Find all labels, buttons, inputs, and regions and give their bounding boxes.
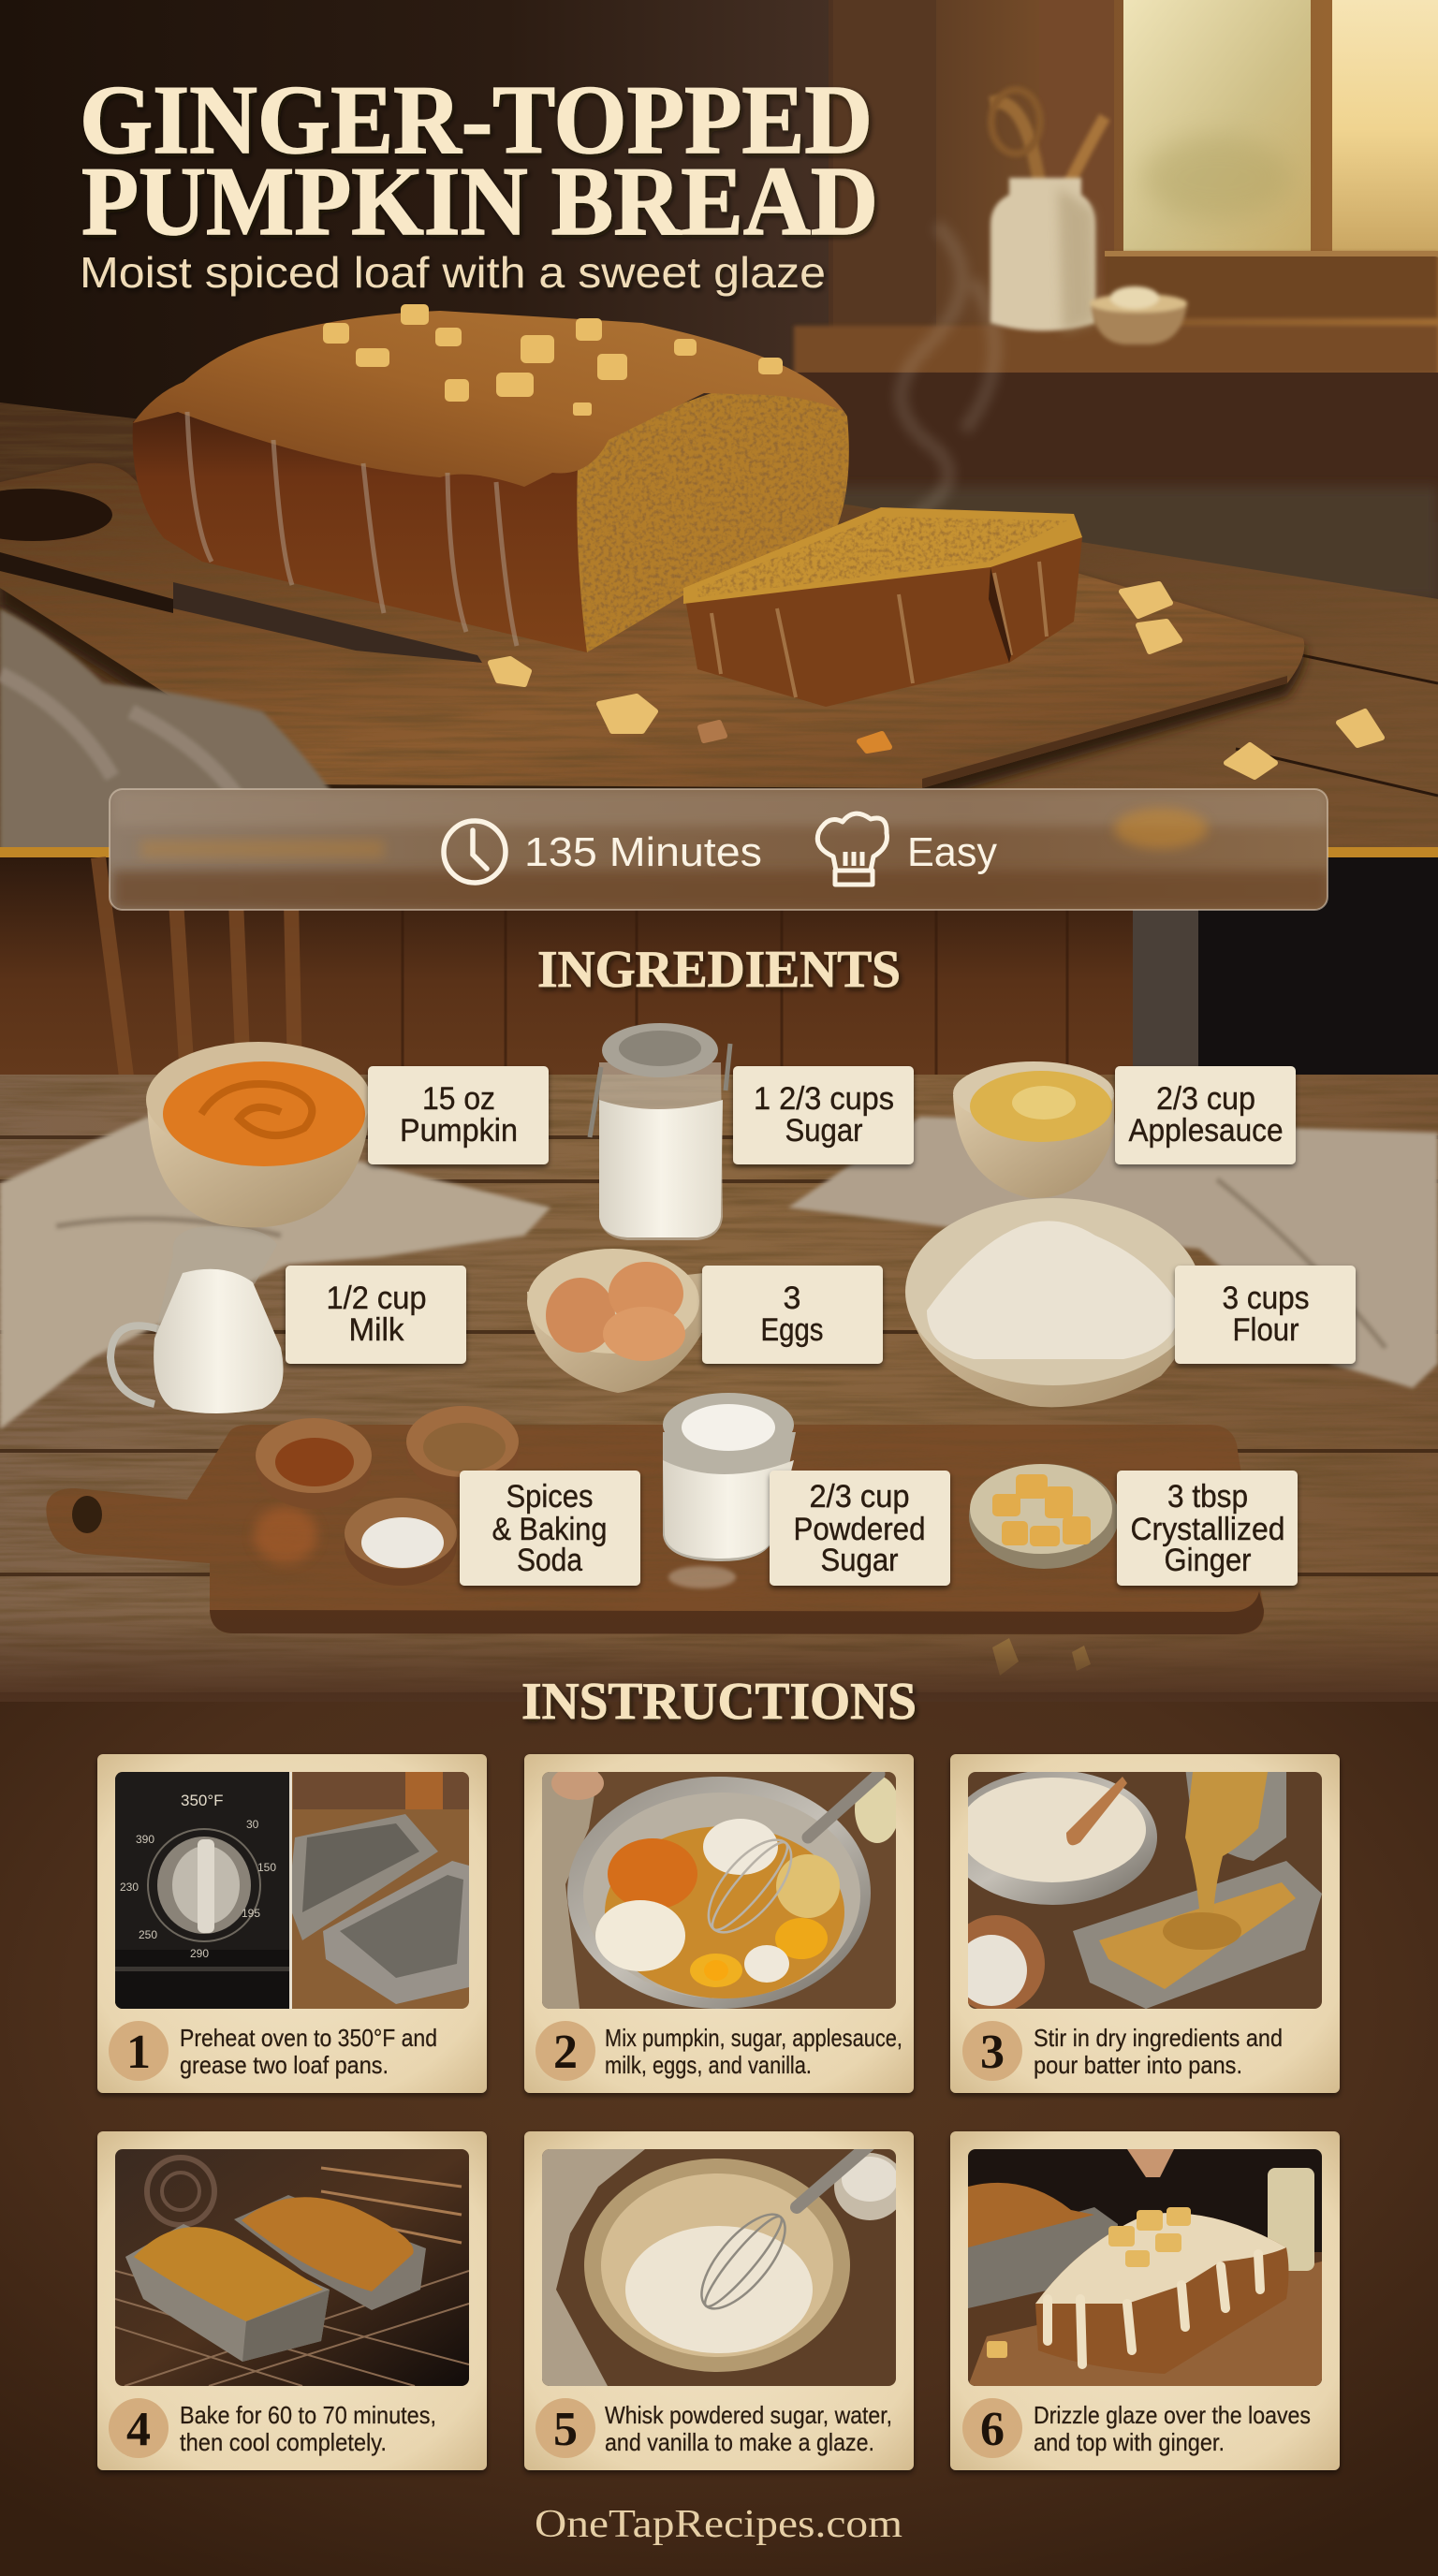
step 1 photo: oven dial and loaf pans: 390 bbox=[136, 1833, 154, 1846]
wooden cutting board bbox=[0, 463, 1304, 801]
label: crystallized ginger: 3 tbsp bbox=[1167, 1479, 1248, 1515]
step 6 text: Drizzle glaze over the loaves bbox=[1034, 2401, 1311, 2429]
label: applesauce bbox=[1115, 1066, 1296, 1164]
orange divider band bbox=[0, 847, 1438, 857]
heading: ingredients: INGREDIENTS bbox=[537, 941, 901, 999]
ingredient: spice bowls bbox=[256, 1406, 519, 1586]
step 2 number: 2 bbox=[553, 2026, 578, 2079]
step 1 photo: oven dial and loaf pans: 195 bbox=[242, 1907, 260, 1920]
label: powdered sugar bbox=[770, 1471, 950, 1586]
step 1 number: 1 bbox=[126, 2026, 151, 2079]
pumpkin loaf bbox=[133, 304, 849, 652]
step 6 photo: glazed loaf topped with ginger bbox=[968, 2149, 1322, 2386]
glass time and difficulty bar bbox=[110, 789, 1329, 910]
step 3 photo: pouring batter into pan bbox=[947, 1767, 1322, 2012]
step 1 photo: oven dial and loaf pans bbox=[115, 1772, 469, 2009]
ingredient: milk jug bbox=[110, 1226, 283, 1413]
table top bbox=[0, 402, 1438, 856]
label: crystallized ginger: Crystallized bbox=[1131, 1512, 1284, 1547]
step card 6 bbox=[950, 2131, 1340, 2470]
cream jar with utensils bbox=[990, 90, 1105, 332]
label: flour bbox=[1175, 1266, 1356, 1364]
step 3 number bbox=[962, 2021, 1022, 2081]
label: sugar bbox=[733, 1066, 914, 1164]
window with wooden frame bbox=[829, 0, 1438, 374]
step 2 number bbox=[536, 2021, 595, 2081]
step card 2 bbox=[524, 1754, 914, 2093]
label: sugar: Sugar bbox=[785, 1113, 863, 1149]
step 4 text: then cool completely. bbox=[180, 2428, 387, 2456]
label: pumpkin: 15 oz bbox=[422, 1081, 495, 1117]
cutting board with handle bbox=[46, 1425, 1264, 1634]
step 1 text: grease two loaf pans. bbox=[180, 2051, 389, 2079]
label: pumpkin bbox=[368, 1066, 549, 1164]
label: applesauce: 2/3 cup bbox=[1156, 1081, 1255, 1117]
step 3 number: 3 bbox=[980, 2026, 1005, 2079]
title: PUMPKIN BREAD bbox=[81, 146, 878, 256]
icon: clock bbox=[444, 821, 506, 883]
step 2 text bbox=[605, 2024, 902, 2079]
step 1 text: Preheat oven to 350°F and bbox=[180, 2024, 437, 2052]
step 3 text bbox=[1034, 2024, 1283, 2079]
step card 1 bbox=[97, 1754, 487, 2093]
label: milk: Milk bbox=[348, 1312, 404, 1348]
ingredient: powdered sugar jar bbox=[663, 1393, 796, 1561]
step 5 photo: whisking glaze in bowl bbox=[542, 2144, 905, 2386]
label: pumpkin: Pumpkin bbox=[400, 1113, 518, 1149]
panel: wooden ingredients table bbox=[0, 1075, 1438, 1692]
linen cloths on table bbox=[0, 1117, 1438, 1429]
ingredient: sugar jar bbox=[590, 1023, 730, 1240]
linen cloth bbox=[0, 607, 331, 847]
label: powdered sugar: Sugar bbox=[820, 1543, 899, 1578]
step 1 photo: oven dial and loaf pans: 230 bbox=[120, 1881, 139, 1894]
time text: 135 Minutes bbox=[524, 829, 762, 875]
step 1 photo: oven dial and loaf pans: 250 bbox=[139, 1928, 157, 1941]
label: milk bbox=[286, 1266, 466, 1364]
steam bbox=[899, 225, 995, 524]
step 6 text: and top with ginger. bbox=[1034, 2428, 1225, 2456]
step 5 number: 5 bbox=[553, 2403, 578, 2456]
step card 3 bbox=[947, 1754, 1340, 2093]
ingredient: pumpkin bowl bbox=[146, 1042, 371, 1227]
step 1 photo: oven dial and loaf pans: 150 bbox=[257, 1861, 276, 1874]
step 6 text bbox=[1034, 2401, 1311, 2456]
label: flour: 3 cups bbox=[1223, 1281, 1309, 1316]
step 4 photo: loaves baking in oven bbox=[115, 2149, 469, 2386]
step card 5 bbox=[524, 2131, 914, 2470]
step 1 photo: oven dial and loaf pans: 30 bbox=[246, 1818, 259, 1831]
step 1 number bbox=[109, 2021, 169, 2081]
step 1 text bbox=[180, 2024, 437, 2079]
label: spices and baking soda: & Baking bbox=[492, 1512, 607, 1547]
window sill shelf bbox=[794, 326, 1438, 599]
label: flour: Flour bbox=[1232, 1312, 1299, 1348]
footer website: OneTapRecipes.com bbox=[535, 2503, 902, 2546]
step 2 text: Mix pumpkin, sugar, applesauce, bbox=[605, 2024, 902, 2052]
label: eggs: 3 bbox=[784, 1281, 800, 1316]
ingredient: crystallized ginger bowl bbox=[969, 1464, 1119, 1676]
ingredient: eggs bowl bbox=[527, 1249, 704, 1393]
step 2 text: milk, eggs, and vanilla. bbox=[605, 2051, 812, 2079]
step 4 number: 4 bbox=[126, 2403, 151, 2456]
knife bbox=[0, 552, 482, 663]
label: crystallized ginger: Ginger bbox=[1165, 1543, 1251, 1578]
title: GINGER-TOPPED bbox=[80, 65, 873, 174]
label: spices and baking soda: Spices bbox=[506, 1479, 594, 1515]
heading: instructions: INSTRUCTIONS bbox=[521, 1673, 917, 1731]
step 2 photo: mixing bowl with wet ingredients bbox=[542, 1766, 900, 2009]
panel: hero photo of pumpkin loaf in rustic kitchen bbox=[0, 0, 1438, 856]
difficulty text: Easy bbox=[907, 829, 997, 875]
label: sugar: 1 2/3 cups bbox=[754, 1081, 894, 1117]
step 5 text: and vanilla to make a glaze. bbox=[605, 2428, 874, 2456]
label: spices and baking soda bbox=[460, 1471, 640, 1586]
ingredient: flour bowl bbox=[905, 1198, 1202, 1407]
step 4 text bbox=[180, 2401, 436, 2456]
step 5 number bbox=[536, 2398, 595, 2458]
label: eggs bbox=[702, 1266, 883, 1364]
label: crystallized ginger bbox=[1117, 1471, 1298, 1586]
panel: lower dark background bbox=[0, 1610, 1438, 2576]
step 5 text bbox=[605, 2401, 892, 2456]
step 6 number: 6 bbox=[980, 2403, 1005, 2456]
step 4 number bbox=[109, 2398, 169, 2458]
label: milk: 1/2 cup bbox=[326, 1281, 427, 1316]
step 5 text: Whisk powdered sugar, water, bbox=[605, 2401, 892, 2429]
step 6 number bbox=[962, 2398, 1022, 2458]
panel: ingredients background with kitchen wall bbox=[0, 857, 1438, 1082]
cut slice of loaf bbox=[683, 507, 1082, 707]
icon: chef hat bbox=[817, 813, 887, 885]
label: powdered sugar: 2/3 cup bbox=[809, 1479, 910, 1515]
step 1 photo: oven dial and loaf pans: 290 bbox=[190, 1947, 209, 1960]
step 3 text: Stir in dry ingredients and bbox=[1034, 2024, 1283, 2052]
label: applesauce: Applesauce bbox=[1129, 1113, 1283, 1149]
subtitle: Moist spiced loaf with a sweet glaze bbox=[80, 248, 826, 297]
ingredient: applesauce bowl bbox=[953, 1061, 1114, 1198]
label: spices and baking soda: Soda bbox=[517, 1543, 582, 1578]
step card 4 bbox=[97, 2131, 487, 2470]
label: powdered sugar: Powdered bbox=[794, 1512, 925, 1547]
ginger crystal pieces bbox=[491, 584, 1382, 777]
step 3 text: pour batter into pans. bbox=[1034, 2051, 1242, 2079]
step 1 photo: oven dial and loaf pans: 350°F bbox=[181, 1792, 224, 1809]
step 4 text: Bake for 60 to 70 minutes, bbox=[180, 2401, 436, 2429]
small bowl on sill bbox=[1090, 286, 1187, 344]
label: eggs: Eggs bbox=[760, 1312, 824, 1348]
title bbox=[80, 65, 878, 256]
